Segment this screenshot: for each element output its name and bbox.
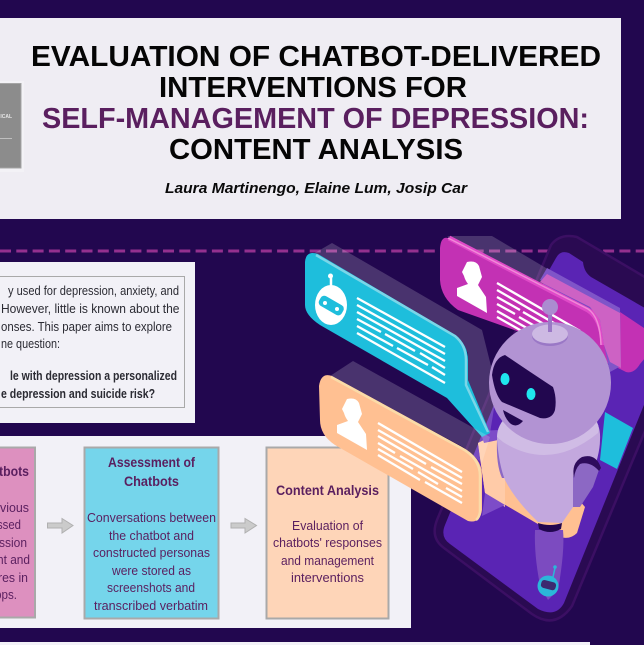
translucent screen pane bbox=[540, 268, 621, 372]
dashed divider bbox=[0, 250, 644, 252]
peach platform bbox=[478, 425, 585, 538]
title: CONTENT ANALYSIS bbox=[169, 134, 463, 166]
text lines bbox=[357, 298, 445, 383]
cyan bubble bbox=[305, 253, 490, 437]
introduction text bbox=[1, 284, 180, 401]
journal cover thumbnail: ICAL bbox=[0, 114, 12, 120]
box: assessment of chatbots bbox=[84, 448, 218, 618]
mini robot bbox=[538, 565, 558, 596]
antenna bbox=[532, 299, 568, 346]
magenta bubble outer end bbox=[618, 312, 644, 372]
text lines bbox=[378, 423, 462, 503]
box: chatbots: tbots bbox=[0, 463, 29, 479]
title bbox=[31, 41, 601, 166]
box: content analysis: interventions bbox=[291, 571, 364, 585]
title: SELF-MANAGEMENT OF DEPRESSION: bbox=[42, 103, 589, 135]
title panel bbox=[0, 18, 621, 219]
box: assessment of chatbots: were stored as bbox=[111, 564, 191, 578]
text lines bbox=[497, 283, 580, 347]
title: EVALUATION OF CHATBOT-DELIVERED bbox=[31, 41, 601, 73]
box: assessment of chatbots: constructed personas bbox=[93, 546, 210, 560]
peach bubble bbox=[319, 375, 482, 522]
box: assessment of chatbots: Conversations between bbox=[87, 511, 216, 525]
box: content analysis bbox=[266, 448, 388, 618]
authors: Laura Martinengo, Elaine Lum, Josip Car bbox=[165, 180, 468, 197]
person icon bbox=[457, 262, 487, 313]
box: assessment of chatbots: the chatbot and bbox=[109, 529, 194, 543]
box: assessment of chatbots: screenshots and bbox=[107, 581, 195, 595]
box: assessment of chatbots: Chatbots bbox=[124, 473, 179, 489]
right arm bbox=[573, 462, 600, 507]
introduction text: le with depression a personalized bbox=[10, 369, 177, 383]
box: content analysis: Content Analysis bbox=[276, 482, 379, 498]
journal cover thumbnail bbox=[0, 81, 24, 172]
base ring bbox=[538, 523, 562, 532]
title: INTERVENTIONS FOR bbox=[159, 72, 467, 104]
box: assessment of chatbots: Assessment of bbox=[108, 454, 195, 470]
box: content analysis: and management bbox=[281, 554, 374, 568]
arrow bbox=[231, 518, 256, 533]
head bbox=[489, 322, 611, 444]
magenta bubble shadow bbox=[447, 236, 603, 345]
illustration: phone with robot and chat bubbles bbox=[305, 236, 644, 620]
magenta bubble bbox=[440, 238, 610, 364]
phone screen bbox=[443, 252, 644, 612]
introduction text: y used for depression, anxiety, and bbox=[8, 284, 179, 298]
box: chatbots bbox=[0, 448, 35, 618]
introduction text: e depression and suicide risk? bbox=[1, 387, 155, 401]
box: assessment of chatbots: transcribed verbatim bbox=[94, 599, 208, 613]
box: content analysis: Evaluation of bbox=[292, 519, 364, 533]
arrow bbox=[48, 518, 73, 533]
cyan bubble shadow bbox=[313, 243, 497, 433]
introduction text: onses. This paper aims to explore bbox=[1, 320, 172, 334]
bottom panel bbox=[0, 642, 590, 645]
visor bbox=[492, 355, 556, 418]
cyan screen band bbox=[600, 412, 633, 469]
robot icon bbox=[315, 274, 347, 325]
introduction text: ne question: bbox=[1, 337, 60, 351]
introduction text: However, little is known about the bbox=[1, 302, 180, 316]
left arm bbox=[497, 440, 506, 478]
phone body bbox=[435, 236, 644, 620]
panel: study flow bbox=[0, 436, 411, 628]
box: chatbots: vious bbox=[0, 501, 29, 515]
mouth bbox=[503, 410, 523, 425]
person icon bbox=[337, 398, 367, 450]
collar bbox=[497, 415, 599, 455]
peach bubble shadow bbox=[330, 361, 490, 463]
tractor beam bbox=[535, 530, 563, 600]
robot bbox=[489, 299, 611, 600]
box: content analysis: chatbots' responses bbox=[273, 536, 382, 550]
body bbox=[497, 415, 600, 523]
eyes bbox=[500, 373, 510, 385]
panel: introduction bbox=[0, 262, 195, 423]
